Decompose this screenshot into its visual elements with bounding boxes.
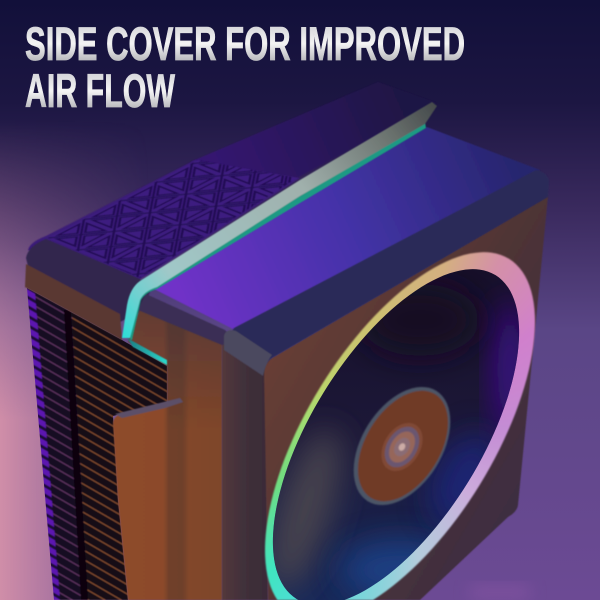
patterned top grille <box>28 160 300 279</box>
top edge band <box>138 170 549 376</box>
fan disk and hub <box>272 269 520 600</box>
fan hub <box>334 370 470 522</box>
light strip <box>122 102 437 340</box>
main top cover <box>150 127 540 330</box>
RGB fan ring <box>264 251 536 600</box>
front dark corner column <box>222 340 268 600</box>
fan disk <box>272 269 520 600</box>
heat sink fins <box>20 280 170 600</box>
side bracket plate <box>113 308 222 600</box>
left wall band <box>25 239 150 340</box>
rear top cover <box>190 82 437 178</box>
cyan lower light edge <box>127 338 167 365</box>
title: AIR FLOW <box>25 64 175 117</box>
front face plate <box>264 196 548 600</box>
